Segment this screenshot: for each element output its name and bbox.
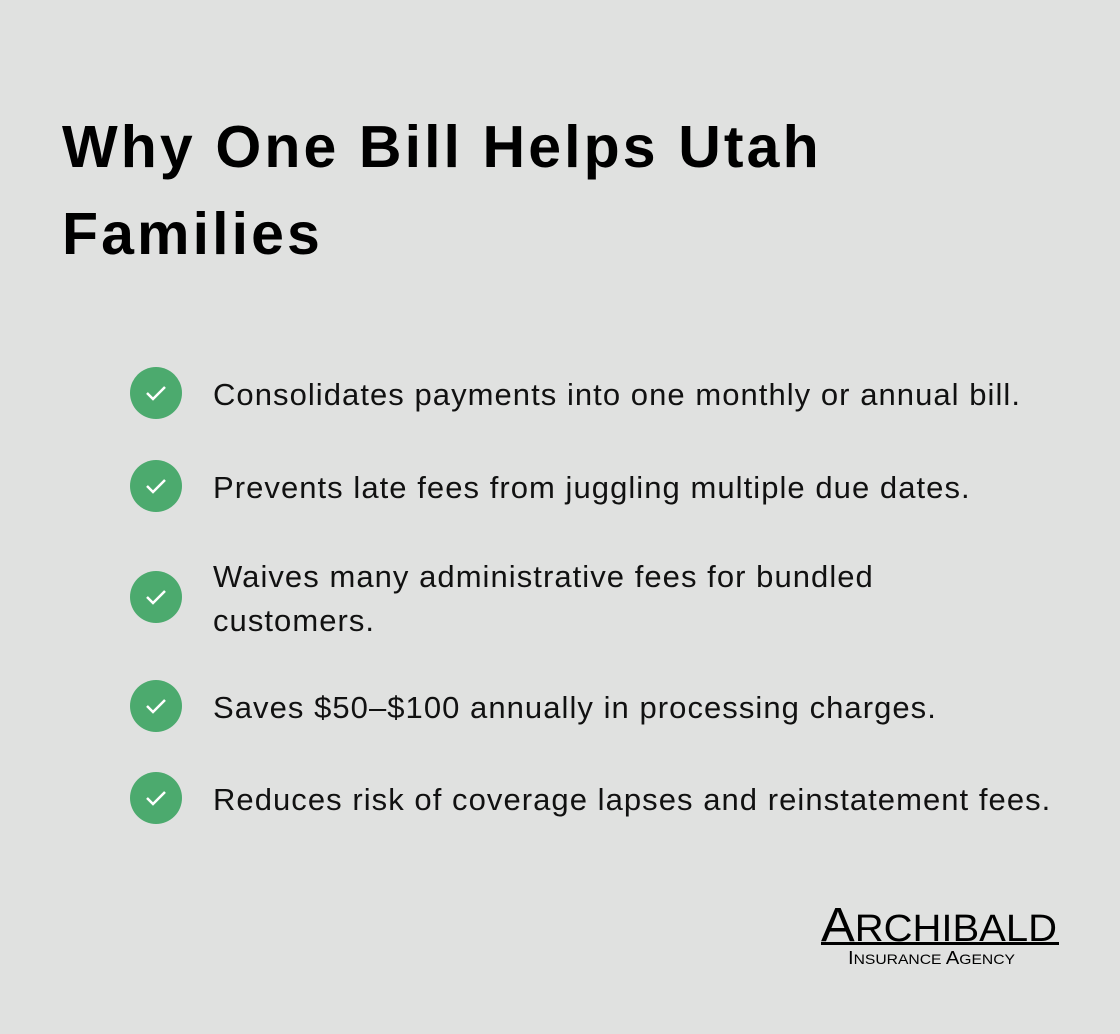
item 4 — [130, 680, 937, 732]
item 4: Saves $50–$100 annually in processing charges. — [213, 690, 937, 725]
item 2 — [130, 460, 971, 512]
title — [62, 114, 822, 267]
item 2: Prevents late fees from juggling multiple due dates. — [213, 470, 971, 505]
item 5: Reduces risk of coverage lapses and reinstatement fees. — [213, 782, 1051, 817]
title: Why One Bill Helps Utah — [62, 114, 822, 180]
title: Families — [62, 201, 323, 267]
item 3: Waives many administrative fees for bundled — [213, 559, 874, 594]
item 5 — [130, 772, 1051, 824]
item 3: customers. — [213, 603, 375, 638]
item 1 — [130, 367, 1021, 419]
logo: INSURANCE AGENCY — [848, 948, 1016, 968]
logo: ARCHIBALD — [821, 899, 1057, 952]
item 3 — [130, 559, 874, 638]
item 1: Consolidates payments into one monthly or annual bill. — [213, 377, 1021, 412]
